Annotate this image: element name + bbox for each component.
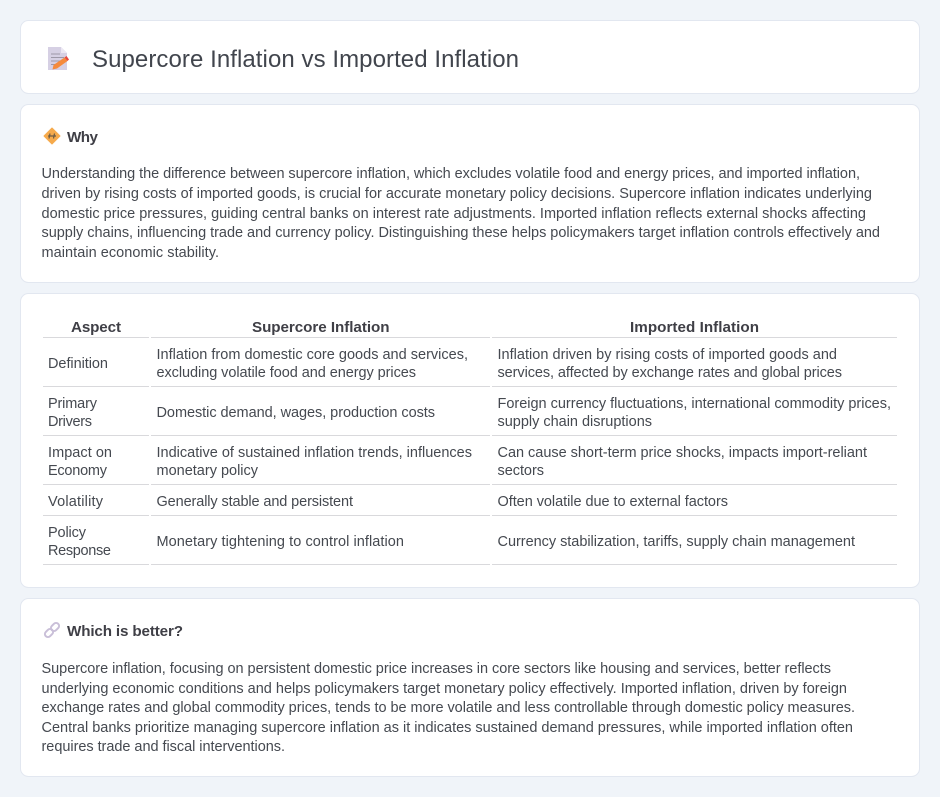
table header row: Supercore Inflation [252, 319, 390, 336]
table row: primary drivers: Primary [48, 396, 98, 412]
text block: why explanation: supply chains, influencing trade and currency policy. Distinguishing these helps policymakers target inflation controls effectively and [42, 225, 880, 241]
table row: definition: excluding volatile food and energy prices [156, 365, 416, 381]
heading: which is better: Which is better? [67, 623, 183, 640]
panel: why [20, 104, 920, 282]
table row: primary drivers: supply chain disruptions [498, 414, 652, 430]
icon: orange diamond sign [44, 128, 60, 144]
table row: impact on economy: Economy [48, 463, 108, 479]
table row: primary drivers: Foreign currency fluctuations, international commodity prices, [498, 396, 891, 412]
table row: volatility: Generally stable and persistent [156, 494, 353, 510]
table row: policy response: Currency stabilization, tariffs, supply chain management [498, 534, 855, 550]
text block: which is better explanation: Supercore inflation, focusing on persistent domestic price increases in core sectors like housing and services, better reflects [42, 661, 831, 677]
text block: why explanation: domestic price pressures, guiding central banks on interest rate adjustments. Imported inflation reflects external shocks affecting [42, 206, 866, 222]
table row: impact on economy: Impact on [48, 445, 112, 461]
table row: policy response: Monetary tightening to control inflation [156, 534, 404, 550]
table header row [43, 319, 897, 338]
table header row: Imported Inflation [630, 319, 759, 336]
table row: volatility [43, 494, 897, 516]
heading: why: Why [67, 129, 99, 146]
table row: impact on economy [43, 445, 897, 485]
table row: definition [43, 347, 897, 387]
panel: comparison table [20, 294, 920, 588]
text block: which is better explanation: exchange rates and global commodity prices, tends to be more volatile and less controllable through domestic policy measures. [42, 700, 855, 716]
table row: definition: Inflation from domestic core goods and services, [156, 347, 468, 363]
table row: primary drivers: Drivers [48, 414, 92, 430]
text block: why explanation [42, 166, 880, 261]
text block: why explanation: driven by rising costs of imported goods, is crucial for accurate monetary policy decisions. Supercore inflation indicates underlying [42, 186, 872, 202]
table row: policy response [43, 525, 897, 565]
table row: impact on economy: monetary policy [156, 463, 259, 479]
table row: volatility: Volatility [48, 494, 104, 510]
table row: volatility: Often volatile due to external factors [498, 494, 728, 510]
table row: impact on economy: Can cause short-term price shocks, impacts import-reliant [498, 445, 867, 461]
table row: definition: Inflation driven by rising costs of imported goods and [498, 347, 837, 363]
table row: definition: services, affected by exchange rates and global prices [498, 365, 842, 381]
table row: primary drivers [43, 396, 897, 436]
table row: primary drivers: Domestic demand, wages, production costs [156, 405, 435, 421]
table row: policy response: Policy [48, 525, 87, 541]
text block: why explanation: Understanding the difference between supercore inflation, which excludes volatile food and energy prices, and imported inflation, [42, 166, 860, 182]
table header row: Aspect [71, 319, 121, 336]
icon: chain link [44, 622, 60, 638]
text block: which is better explanation: requires trade and fiscal interventions. [42, 739, 285, 755]
title: Supercore Inflation vs Imported Inflation [92, 46, 519, 73]
icon: memo with pencil [48, 47, 69, 70]
text block: which is better explanation: Central banks prioritize managing supercore inflation as it indicates sustained demand pressures, while imported inflation often [42, 720, 853, 736]
table row: impact on economy: sectors [498, 463, 544, 479]
panel: which is better [20, 598, 920, 776]
text block: why explanation: maintain economic stability. [42, 245, 219, 261]
table row: policy response: Response [48, 543, 111, 559]
table row: impact on economy: Indicative of sustained inflation trends, influences [156, 445, 472, 461]
panel: title header [20, 20, 920, 94]
text block: which is better explanation: underlying economic conditions and helps policymakers target monetary policy effectively. Imported inflation, driven by foreign [42, 681, 847, 697]
text block: which is better explanation [42, 661, 855, 755]
table row: definition: Definition [48, 356, 108, 372]
